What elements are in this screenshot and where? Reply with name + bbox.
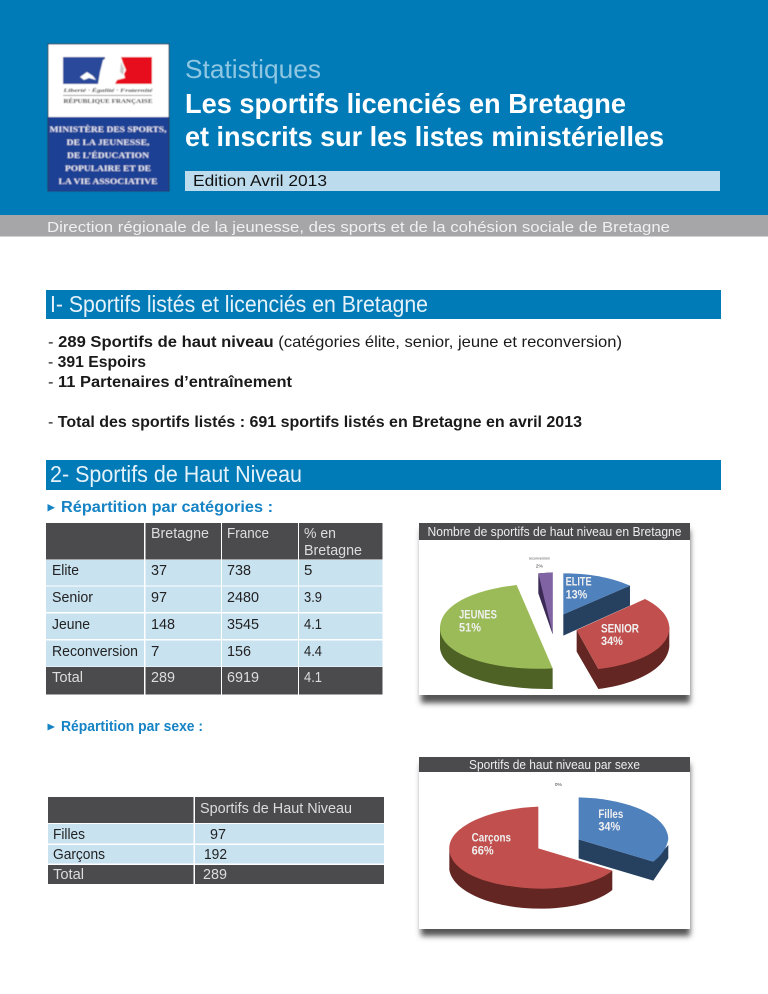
title: et inscrits sur les listes ministérielles	[185, 121, 664, 152]
slice: filles: Filles	[598, 808, 623, 821]
slice: reconversion	[529, 557, 553, 634]
slice: jeunes: JEUNES	[459, 609, 497, 622]
table: catégories: 3.9	[304, 589, 322, 606]
table: sexe: Total	[53, 866, 84, 883]
table: catégories	[46, 523, 382, 694]
table: catégories: 289	[151, 669, 175, 686]
logo: ministère: DE L’ÉDUCATION	[67, 150, 149, 160]
slice: elite: ELITE	[566, 576, 592, 589]
table: sexe: 289	[203, 866, 227, 883]
table: catégories: 3545	[227, 616, 259, 633]
table: catégories: Total	[52, 669, 83, 686]
slice: reconversion: 2%	[536, 563, 543, 569]
slice: jeunes	[440, 585, 553, 689]
slice: jeunes: 51%	[459, 622, 482, 635]
table: catégories: 4.1	[304, 669, 322, 686]
table: catégories: 97	[151, 589, 167, 606]
table: catégories: 5	[304, 562, 312, 579]
section heading 1: I- Sportifs listés et licenciés en Bretagne	[50, 291, 428, 317]
edition bar: Edition Avril 2013	[193, 173, 327, 190]
table: catégories: 4.1	[304, 616, 322, 633]
pie chart: nombre de sportifs	[419, 523, 690, 703]
table: catégories: France	[227, 525, 269, 542]
direction band	[0, 215, 768, 236]
pie chart: par sexe: Sportifs de haut niveau par sexe	[469, 757, 640, 772]
section heading 2	[46, 460, 721, 490]
logo: ministère: MINISTÈRE DES SPORTS,	[50, 124, 166, 134]
section heading 1	[46, 290, 721, 319]
logo: ministère: LA VIE ASSOCIATIVE	[58, 177, 158, 186]
pie chart: nombre de sportifs: Nombre de sportifs de haut niveau en Bretagne	[428, 524, 682, 539]
slice: elite: 13%	[566, 588, 588, 601]
slice: garçons: Carçons	[472, 832, 511, 845]
table: sexe: Filles	[53, 826, 85, 843]
table: catégories: 2480	[227, 589, 259, 606]
text block: sportifs listés: - 289 Sportifs de haut niveau (catégories élite, senior, jeune et reconversion)	[48, 334, 622, 351]
table: sexe: 97	[210, 826, 226, 843]
table: sexe	[48, 797, 384, 884]
table: catégories: % en	[304, 525, 336, 542]
table: sexe: Garçons	[53, 846, 105, 863]
table: catégories: Elite	[52, 562, 79, 579]
logo: ministère: DE LA JEUNESSE,	[66, 138, 150, 147]
table: catégories: 738	[227, 562, 251, 579]
slice: filles: 34%	[598, 821, 621, 834]
slice: senior: 34%	[601, 635, 624, 648]
slice: garçons: 66%	[472, 845, 494, 858]
table: catégories: Jeune	[52, 616, 90, 633]
edition bar	[185, 171, 720, 191]
table: catégories: 156	[227, 643, 251, 660]
table: catégories: Bretagne	[151, 525, 209, 542]
table: sexe: 192	[204, 846, 227, 863]
table: catégories: Senior	[52, 589, 93, 606]
heading: statistiques: Statistiques	[185, 54, 321, 84]
slice: reconversion: reconversion	[529, 557, 550, 561]
direction band: Direction régionale de la jeunesse, des sports et de la cohésion sociale de Bretagne	[47, 219, 670, 236]
logo: ministère: Liberté · Égalité · Fraternité	[62, 88, 154, 94]
slice: filles	[579, 797, 668, 881]
table: catégories: 6919	[227, 669, 259, 686]
logo: ministère: RÉPUBLIQUE FRANÇAISE	[64, 97, 152, 105]
slice: garçons	[449, 807, 612, 909]
subheading: répartition par catégories: Répartition par catégories :	[61, 499, 273, 516]
section heading 2: 2- Sportifs de Haut Niveau	[50, 461, 302, 487]
text block: sportifs listés	[48, 334, 622, 431]
table: catégories: 4.4	[304, 643, 322, 660]
text block: sportifs listés: - 391 Espoirs	[48, 354, 146, 371]
pie chart: par sexe: 0%	[555, 782, 562, 788]
table: sexe: Sportifs de Haut Niveau	[200, 800, 352, 817]
text block: sportifs listés: - 11 Partenaires d’entraînement	[48, 374, 293, 391]
table: catégories: Bretagne	[304, 542, 362, 559]
slice: senior	[577, 599, 669, 689]
logo: ministère	[48, 44, 169, 191]
slice: senior: SENIOR	[601, 622, 639, 635]
pie chart: par sexe	[419, 757, 690, 936]
logo: ministère: POPULAIRE ET DE	[65, 164, 151, 173]
title	[185, 88, 664, 152]
table: catégories: 148	[151, 616, 175, 633]
subheading: répartition par sexe: Répartition par sexe :	[61, 719, 203, 735]
table: catégories: 37	[151, 562, 167, 579]
table: catégories: 7	[151, 643, 159, 660]
slice: elite	[563, 573, 630, 636]
text block: sportifs listés: - Total des sportifs listés : 691 sportifs listés en Bretagne en avril 2013	[48, 414, 582, 431]
table: catégories: Reconversion	[52, 643, 138, 660]
header banner	[0, 0, 768, 215]
title: Les sportifs licenciés en Bretagne	[185, 88, 626, 119]
